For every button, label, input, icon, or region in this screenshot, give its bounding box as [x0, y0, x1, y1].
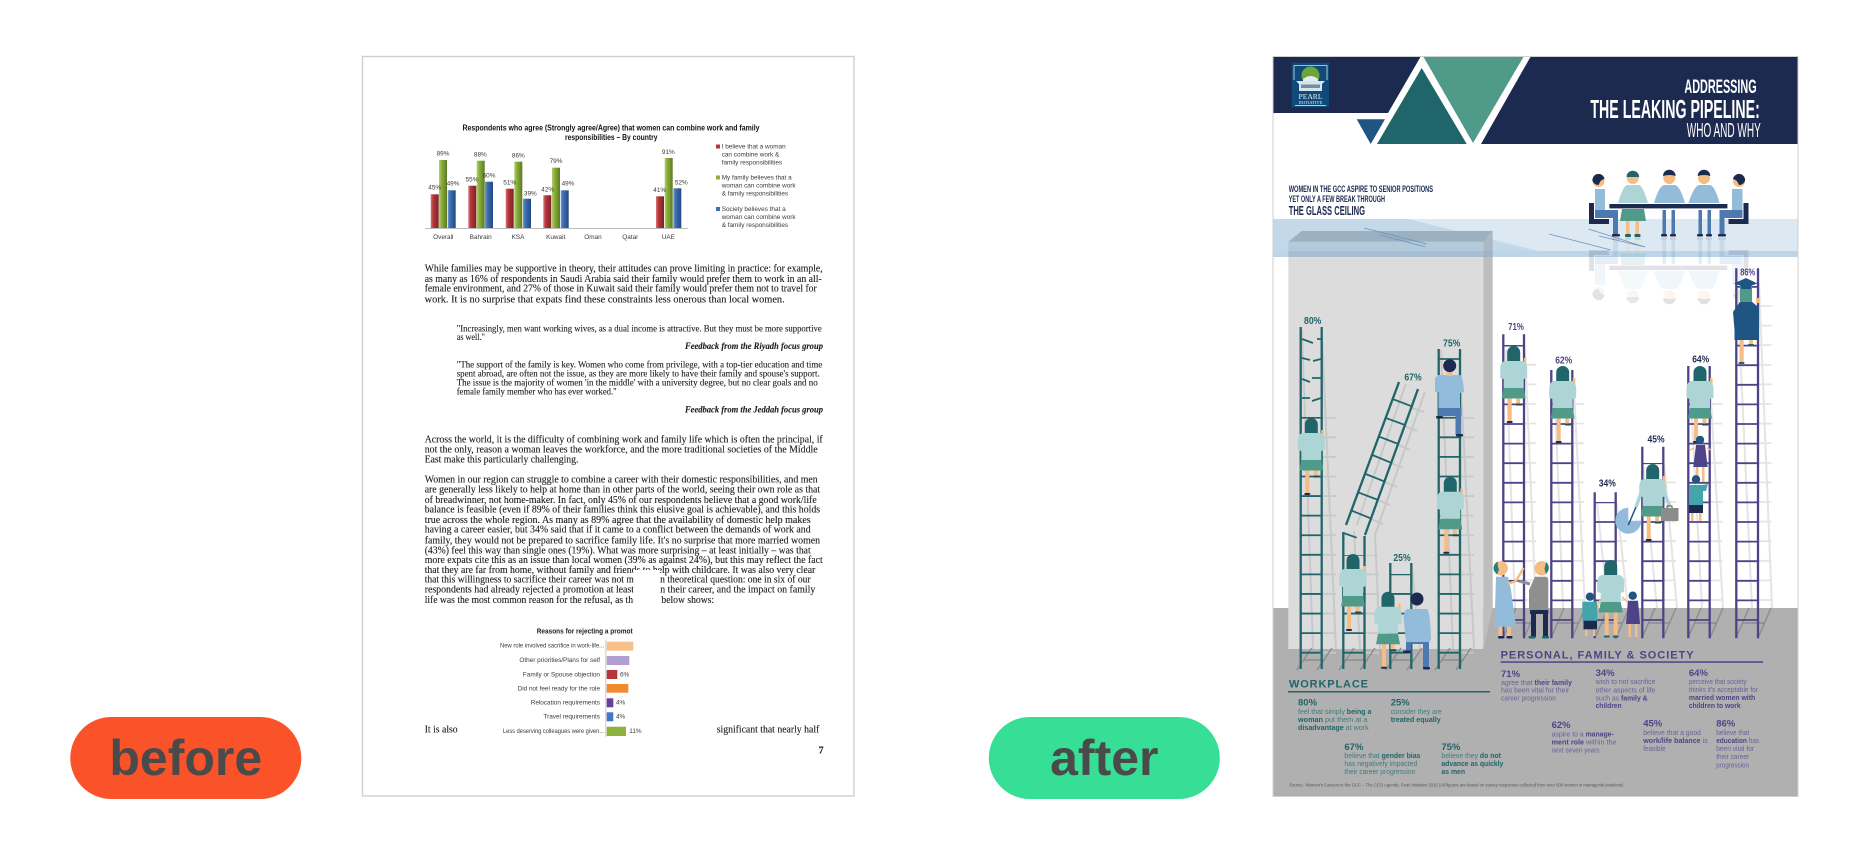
title: WHO AND WHY — [1687, 120, 1761, 142]
quotes from focus groups: female family member who has ever worked." — [457, 387, 617, 397]
label: 25%: 25% — [1393, 553, 1411, 564]
label: 67%: 67% — [1404, 373, 1422, 384]
bar chart: agreement by country: 42% — [541, 186, 554, 193]
section: workplace: WORKPLACE — [1289, 679, 1368, 691]
panel: before page — [362, 56, 854, 796]
bar chart: agreement by country: Bahrain — [470, 234, 492, 241]
chart legend: & family responsibilities — [722, 222, 788, 229]
stat: 75%: believe they do not — [1441, 751, 1501, 760]
logo — [1292, 63, 1329, 107]
stat: 45%: feasible — [1643, 744, 1666, 753]
bar chart: agreement by country: 39% — [524, 191, 537, 198]
stat: 64%: married women with — [1689, 693, 1756, 702]
quotes from focus groups: Feedback from the Riyadh focus group — [684, 341, 823, 351]
stat: 86%: education has — [1716, 736, 1759, 745]
heading: glass ceiling: YET ONLY A FEW BREAK THROUGH — [1289, 194, 1385, 205]
purple ladders — [1503, 268, 1758, 638]
percentage labels: personal ladders: 45% — [1648, 435, 1665, 446]
page number: 7 — [818, 745, 824, 756]
text block: family attitudes: While families may be supportive in theory, their attitudes can prove limiting in practice: for example, — [425, 264, 823, 275]
bar chart: agreement by country — [425, 124, 796, 241]
chart legend: woman can combine work — [721, 214, 796, 221]
text block: combining work and family: not the only, reason a woman leaves the workforce, and the more traditional societies of the Middle — [425, 444, 818, 455]
stat: 62%: next seven years — [1552, 746, 1600, 755]
stat: 34%: wish to not sacrifice — [1595, 677, 1655, 686]
bar chart: agreement by country: Kuwait — [546, 234, 566, 241]
stat: 86% — [1716, 719, 1759, 769]
stat: 62%: 62% — [1552, 720, 1571, 731]
chart legend: family responsibilities — [722, 160, 782, 166]
percentage labels: personal ladders: 34% — [1599, 479, 1616, 490]
bar chart: reasons for rejecting a promotion: 11% — [629, 728, 642, 735]
stat: 75%: 75% — [1441, 742, 1461, 753]
percentage labels: personal ladders: 62% — [1555, 355, 1572, 366]
logo: PEARL — [1298, 92, 1323, 101]
stat: 80%: disadvantage at work — [1298, 723, 1369, 732]
heading: glass ceiling — [1289, 184, 1433, 218]
text block: domestic responsibilities: that this willingness to sacrifice their career was not more than theoretical question: one in six of our — [425, 575, 811, 586]
man at 75 percent ladder — [1435, 359, 1464, 436]
stat: 67%: has negatively impacted — [1344, 759, 1417, 768]
stat: 62%: aspire to a manage- — [1552, 730, 1614, 739]
stat: 64%: perceive that society — [1689, 677, 1747, 686]
text block: family attitudes: as many as 16% of respondents in Saudi Arabia said their family would prefer them to work in an all- — [425, 274, 822, 285]
ladder: 75 percent — [1439, 339, 1460, 669]
logo: INITIATIVE — [1298, 100, 1323, 105]
bar chart: reasons for rejecting a promotion: 6% — [620, 671, 630, 678]
stat: 25%: treated equally — [1391, 715, 1442, 724]
stat: 62%: ment role within the — [1552, 738, 1616, 747]
text block: domestic responsibilities: true across the whole region. As many as 89% agree that the availability of domestic help makes — [425, 515, 811, 526]
stat: 80%: woman put them at a — [1297, 715, 1368, 724]
figures climbing workplace ladders — [1298, 359, 1464, 670]
elderly man — [1519, 561, 1549, 638]
child climbing: girl — [1690, 436, 1711, 482]
bar chart: reasons for rejecting a promotion: Travel requirements — [543, 714, 600, 721]
text block: family attitudes: female environment, and 27% of those in Kuwait said their family would prefer them not to travel for — [425, 284, 817, 295]
before badge — [70, 717, 301, 799]
stat: 45%: 45% — [1643, 719, 1663, 730]
stat: 34%: children — [1596, 701, 1622, 710]
after badge: after — [1050, 730, 1158, 786]
after badge — [989, 717, 1220, 799]
glass ceiling band — [1273, 219, 1798, 257]
text block: domestic responsibilities: respondents had already rejected a promotion at least once in their career, and the impact on family — [425, 585, 816, 596]
panel: after infographic — [1273, 56, 1798, 796]
text block: combining work and family: East make this particularly challenging. — [425, 455, 578, 466]
percentage labels: personal ladders: 64% — [1692, 355, 1709, 366]
closing text line: significant that nearly half — [717, 725, 820, 736]
stat: 75%: advance as quickly — [1441, 759, 1504, 768]
mother and children — [1582, 560, 1640, 638]
bar chart: reasons for rejecting a promotion: 4% — [616, 714, 626, 721]
bar chart: agreement by country: 49% — [562, 180, 575, 187]
closing text line: It is also — [425, 725, 458, 736]
text block: family attitudes: work. It is no surprise that expats find these constraints less onerous than local women. — [425, 294, 785, 305]
stat: 34%: 34% — [1596, 668, 1615, 679]
bar chart: agreement by country: 89% — [437, 150, 450, 157]
quotes from focus groups: "The support of the family is key. Women who come from privilege, with a top-tier education and time — [457, 360, 822, 370]
stat: 64%: 64% — [1689, 668, 1708, 679]
stat: 86%: progression — [1716, 760, 1749, 769]
bar chart: reasons for rejecting a promotion: Did not feel ready for the role — [518, 685, 600, 692]
stat: 86%: believe that — [1716, 728, 1749, 737]
stat: 80%: 80% — [1298, 698, 1318, 709]
purple ladder shadows — [1506, 283, 1772, 608]
chart legend: My family believes that a — [722, 174, 792, 182]
stat: 67% — [1344, 742, 1420, 776]
bar chart: reasons for rejecting a promotion: Less deserving colleagues were given... — [503, 728, 604, 735]
stat: 86%: 86% — [1716, 719, 1736, 730]
before badge: before — [109, 730, 262, 786]
text block: domestic responsibilities: more expats cite this as an issue than local women (39% as against 24%), but this may reflect the fact — [425, 555, 823, 566]
stat: 80%: feel that simply being a — [1298, 707, 1372, 716]
bar chart: agreement by country: Respondents who agree (Strongly agree/Agree) that women can combine work and family — [462, 124, 760, 133]
bar chart: agreement by country: 55% — [466, 176, 479, 183]
percentage labels: personal ladders: 71% — [1508, 322, 1524, 333]
text block: domestic responsibilities: of breadwinner, not home-maker. In fact, only 45% of our respondents believe that a good work/life — [425, 495, 817, 506]
stat: 71% — [1501, 669, 1573, 703]
quotes from focus groups: as well." — [457, 332, 485, 342]
stat: 71%: has been vital for their — [1501, 686, 1570, 695]
stat: 71%: career progression — [1501, 694, 1556, 703]
chart legend: I believe that a woman — [722, 144, 786, 150]
quotes from focus groups: The issue is the majority of women 'in the middle' with a university degree, but no clear goals and no — [457, 378, 818, 388]
stat: 45%: work/life balance is — [1642, 736, 1708, 745]
bar chart: reasons for rejecting a promotion: Family or Spouse objection — [523, 671, 600, 678]
stat: 62% — [1552, 720, 1616, 755]
bar chart: agreement by country: 41% — [653, 187, 666, 194]
stat: 45% — [1642, 719, 1708, 753]
text block: domestic responsibilities: having a career easier, but 34% said that if it came to a conflict between the demands of work and — [425, 525, 812, 536]
source note: Source: 'Women's Careers in the GCC – The CEO Agenda, Pearl Initiative 2015 (All figures are based on survey responses collected from over 600 women in managerial positions) — [1289, 783, 1624, 788]
stat: 25%: 25% — [1391, 698, 1410, 709]
stat: 71%: agree that their family — [1501, 678, 1573, 687]
ceiling cracks — [1364, 228, 1645, 250]
text block: family attitudes — [425, 264, 823, 305]
bar chart: reasons for rejecting a promotion: New role involved sacrifice in work-life... — [500, 643, 604, 650]
bar chart: agreement by country: 52% — [675, 180, 688, 187]
women climbing personal ladders — [1500, 346, 1714, 443]
text block: domestic responsibilities: that they are far from home, without family and friends to help with childcare. It was also very clear — [425, 565, 816, 576]
stat: 34%: other aspects of life — [1596, 685, 1655, 694]
bar chart: agreement by country: 45% — [428, 184, 441, 191]
bar chart: reasons for rejecting a promotion: Relocation requirements — [531, 700, 600, 707]
bar chart: agreement by country: 49% — [447, 180, 460, 187]
section: workplace — [1288, 679, 1504, 776]
header banner — [1273, 56, 1798, 144]
heading: glass ceiling: WOMEN IN THE GCC ASPIRE TO SENIOR POSITIONS — [1289, 184, 1433, 195]
bar chart: reasons for rejecting a promotion: Other priorities/Plans for self — [519, 657, 600, 664]
quotes from focus groups: "Increasingly, men want working wives, as a dual income is attractive. But they must be more supportive — [457, 324, 822, 334]
bar chart: agreement by country: 60% — [483, 172, 496, 179]
title: ADDRESSING — [1684, 76, 1757, 98]
chart legend: woman can combine work — [721, 182, 796, 190]
ladder: 67 percent broken — [1343, 373, 1422, 669]
quotes from focus groups: spent abroad, are often not the issue, as they are more likely to have their family and spouse's support. — [457, 369, 820, 379]
stat: 80% — [1297, 698, 1372, 732]
bar chart: agreement by country: UAE — [662, 234, 675, 241]
text block: domestic responsibilities: balance is feasible (even if 89% of their families think this elusive goal is achievable), and this holds — [425, 505, 820, 516]
text block: domestic responsibilities: are generally less likely to help at home than in other parts of the world, seeing their own role as that — [425, 485, 820, 496]
reflection of boardroom — [1589, 237, 1748, 304]
stat: 86%: been vital for — [1716, 744, 1755, 753]
building wall — [1288, 231, 1493, 649]
closing text line — [425, 725, 820, 736]
floor shadows — [1297, 608, 1771, 670]
bar chart: agreement by country: 91% — [662, 149, 675, 156]
stat: 67%: believe that gender bias — [1344, 751, 1420, 760]
bar chart: agreement by country: Overall — [433, 234, 453, 241]
text block: domestic responsibilities: life was the most common reason for the refusal, as the chart below shows: — [425, 595, 714, 606]
bar chart: agreement by country: 51% — [503, 179, 516, 186]
section: personal, family and society: PERSONAL, FAMILY & SOCIETY — [1501, 649, 1694, 661]
section: personal, family and society — [1501, 649, 1763, 769]
stat: 64% — [1689, 668, 1758, 710]
text block: domestic responsibilities: Women in our region can struggle to combine a career with their domestic responsibilities, and men — [425, 475, 818, 486]
quotes from focus groups: Feedback from the Jeddah focus group — [684, 404, 823, 414]
ladder: 25 percent — [1390, 553, 1411, 669]
stat: 64%: thinks it's acceptable for — [1689, 685, 1758, 694]
text block: domestic responsibilities — [425, 475, 823, 606]
bar chart: agreement by country: responsibilities – By country — [565, 133, 658, 142]
bar chart: agreement by country: Qatar — [622, 234, 639, 241]
stat: 75%: as men — [1441, 767, 1466, 776]
bar chart: agreement by country: 88% — [474, 151, 487, 158]
bar chart: agreement by country: 86% — [512, 152, 525, 159]
after page border — [1273, 56, 1798, 796]
label: 80%: 80% — [1304, 316, 1321, 327]
label: 75%: 75% — [1443, 339, 1460, 350]
heading: glass ceiling: THE GLASS CEILING — [1289, 204, 1365, 218]
woman with briefcase and pie chart — [1615, 464, 1678, 541]
stat: 25%: consider they are — [1391, 707, 1442, 716]
boardroom team — [1589, 170, 1748, 237]
bar chart: agreement by country: 79% — [550, 158, 563, 165]
stat: 64%: children to work — [1689, 701, 1741, 710]
chart legend — [716, 144, 796, 229]
bar chart: reasons for rejecting a promotion: 4% — [616, 700, 626, 707]
percentage labels: personal ladders: 86% — [1740, 267, 1755, 278]
bar chart: reasons for rejecting a promotion — [500, 627, 642, 737]
stat: 75% — [1441, 742, 1504, 776]
chart legend: can combine work & — [722, 152, 780, 158]
floor — [1273, 608, 1798, 796]
stat: 34%: such as family & — [1596, 693, 1648, 702]
teal ladder shadows — [1302, 330, 1474, 654]
quotes from focus groups — [457, 324, 823, 414]
text block: combining work and family: Across the world, it is the difficulty of combining work and family life which is often the principal, if — [425, 435, 823, 446]
graduate — [1733, 278, 1759, 364]
ladder: 80 percent workplace — [1301, 316, 1322, 669]
stat: 67%: 67% — [1344, 742, 1364, 753]
stat: 71%: 71% — [1501, 669, 1521, 680]
text block: combining work and family — [425, 435, 823, 466]
percentage labels: personal ladders — [1508, 267, 1755, 490]
bar chart: reasons for rejecting a promotion: Reasons for rejecting a promot — [537, 627, 633, 636]
stat: 25% — [1391, 698, 1442, 724]
child climbing: boy — [1689, 475, 1708, 521]
man at 25 percent ladder — [1403, 592, 1431, 670]
chart legend: Society believes that a — [722, 206, 786, 213]
title — [1590, 76, 1761, 142]
text block: domestic responsibilities: (43%) feel this way than single ones (19%). What was more surprising – at least initially – was that — [425, 545, 811, 556]
chart legend: & family responsibilities — [722, 190, 788, 198]
stat: 45%: believe that a good — [1643, 728, 1701, 737]
bar chart: agreement by country: Oman — [584, 234, 602, 241]
stat: 34% — [1595, 668, 1655, 710]
text block: domestic responsibilities: family, they would not be prepared to sacrifice family life. It's no surprise that more married women — [425, 535, 820, 546]
bar chart: agreement by country: KSA — [512, 234, 525, 241]
stat: 86%: their career — [1716, 752, 1749, 761]
elderly woman — [1494, 561, 1524, 638]
stat: 67%: their career progression — [1344, 767, 1415, 776]
